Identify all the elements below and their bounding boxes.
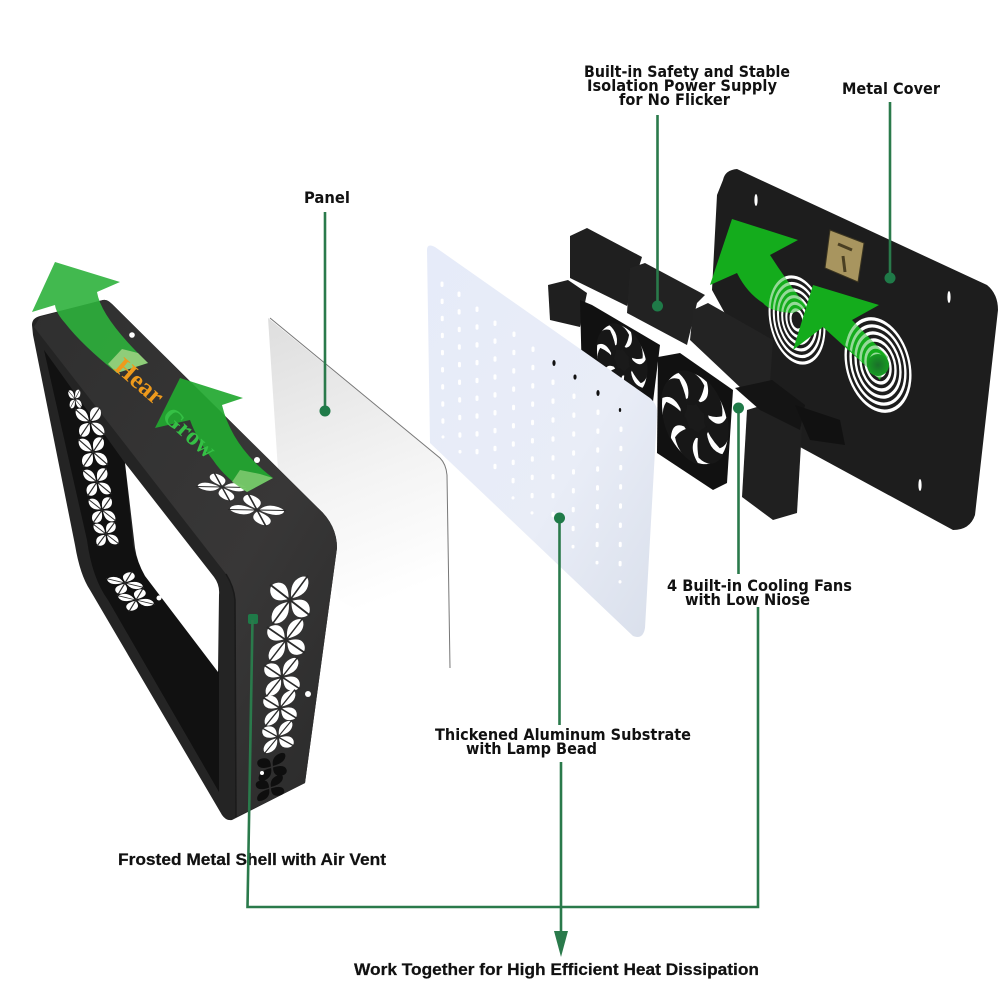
socket [825,230,864,282]
label: metal cover [842,79,940,284]
vents: top face [196,472,286,527]
brand text: Hear Grow: Grow [157,402,221,464]
fan grill: right [846,310,910,420]
brand text: Hear Grow [109,353,221,464]
socket pins [838,244,852,272]
black mounting holes [552,360,621,412]
arrow: rear heat flow [32,262,148,373]
arrow: cover heat flow left [710,219,806,313]
fan grill: left [770,269,824,371]
label: frosted metal shell [118,614,386,869]
bead holes [442,283,621,582]
label: cooling fans: with Low Niose [685,590,810,609]
label: panel [304,188,350,416]
label: aluminum substrate [435,512,691,758]
label: result: Work Together for High Efficient Heat Dissipation [354,960,759,979]
component: transparent panel [268,318,450,668]
label: power supply: Isolation Power Supply [587,76,778,95]
component: frosted metal shell [32,300,337,820]
label: aluminum substrate: with Lamp Bead [466,739,597,758]
label: panel: Panel [304,188,350,207]
label: power supply: for No Flicker [619,90,730,109]
component: power supply boxes [548,228,845,520]
component: aluminum substrate with lamp beads [427,246,657,637]
label: power supply [584,62,790,312]
label: aluminum substrate: Thickened Aluminum Substrate [435,725,691,744]
connector lines joining to result arrow [248,607,758,957]
component: metal cover [712,169,998,530]
arrow: front heat flow [155,378,273,492]
label: frosted metal shell: Frosted Metal Shell with Air Vent [118,850,386,869]
label: metal cover: Metal Cover [842,79,940,98]
vents: inner left face [68,389,155,612]
label: power supply: Built-in Safety and Stable [584,62,790,81]
label: cooling fans [667,402,852,609]
component: cooling fans [580,300,737,491]
brand text: Hear Grow: Hear [109,353,169,410]
screw holes [129,332,311,775]
arrow: cover heat flow right [793,285,889,380]
vents: right face [255,575,310,802]
label: cooling fans: 4 Built-in Cooling Fans [667,576,852,595]
slots [754,194,951,491]
